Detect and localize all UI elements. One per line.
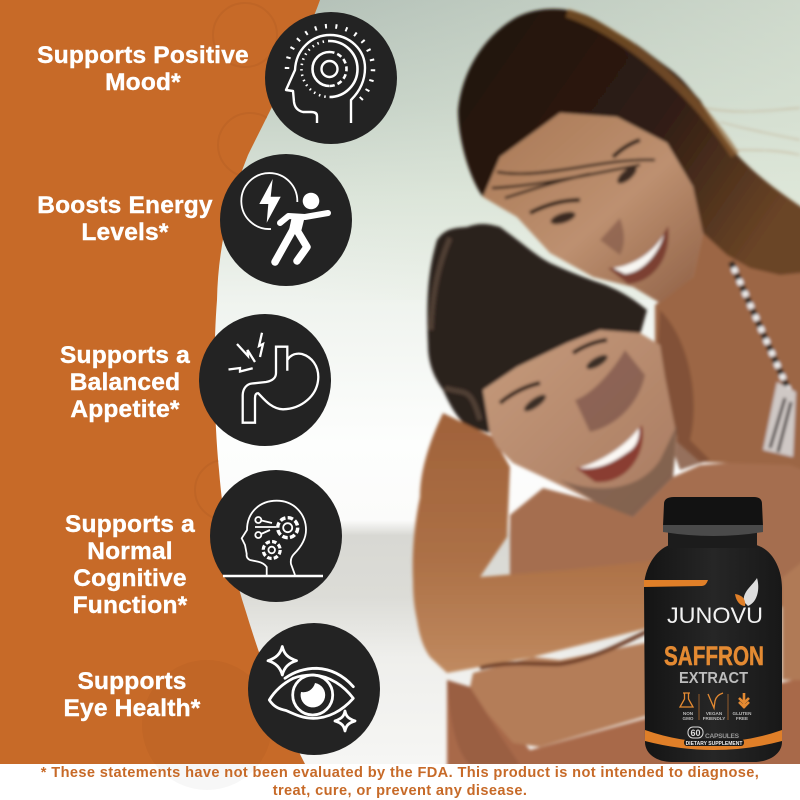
benefit text: positive mood <box>37 42 249 96</box>
clasped hand and forearm <box>470 640 660 747</box>
icon: eye with sparkles <box>248 623 380 755</box>
disclaimer footnote: * These statements have not been evaluated by the FDA. This product is not intended to diagnose, <box>41 765 759 781</box>
badge labels: FRIENDLY <box>703 716 725 721</box>
disclaimer footnote: treat, cure, or prevent any disease. <box>273 782 527 798</box>
badge icons <box>680 693 749 720</box>
woman's chest and shoulder <box>655 233 800 480</box>
icon: stomach with lightning <box>199 314 331 446</box>
woman's hair <box>458 9 800 275</box>
badge labels: VEGAN <box>706 711 723 716</box>
leaf logo <box>735 578 758 606</box>
benefit text: cognitive: Function* <box>73 592 187 619</box>
capsule count: CAPSULES <box>705 733 740 740</box>
benefit text: appetite: Supports a <box>60 342 190 369</box>
benefit text: cognitive: Cognitive <box>73 565 187 592</box>
icon: head with radiating mind <box>265 12 397 144</box>
woman's face <box>483 113 703 303</box>
man's face <box>483 330 677 517</box>
benefit text: appetite <box>60 342 190 423</box>
woman's upper arm wrapping the man <box>413 413 660 673</box>
man's lower body and legs <box>447 670 800 770</box>
badge labels <box>683 711 752 721</box>
benefit text: energy: Levels* <box>81 219 169 246</box>
orange label band bottom <box>645 730 782 750</box>
benefit text: cognitive: Supports a <box>65 511 195 538</box>
cap collar <box>663 525 763 536</box>
badge labels: NON <box>683 711 694 716</box>
badge labels: GMO <box>683 716 694 721</box>
benefit text: eye health: Supports <box>77 668 187 695</box>
benefit text: appetite: Balanced <box>70 369 180 396</box>
loose hair strands <box>705 108 800 155</box>
capsule count: 60 <box>690 728 701 738</box>
benefit text: positive mood: Mood* <box>105 69 181 96</box>
benefit text: eye health <box>63 668 200 722</box>
badge labels: FREE <box>736 716 748 721</box>
benefit text: cognitive: Normal <box>87 538 173 565</box>
product bottle: Junovu Saffron Extract <box>644 497 782 762</box>
man's hair <box>427 224 647 433</box>
disclaimer footnote <box>40 765 759 798</box>
brand name: JUNOVU <box>667 603 763 628</box>
benefit text: positive mood: Supports Positive <box>37 42 249 69</box>
capsule count: DIETARY SUPPLEMENT <box>686 741 742 747</box>
benefit text: appetite: Appetite* <box>70 396 180 423</box>
benefit text: energy: Boosts Energy <box>37 192 213 219</box>
bikini strap and top <box>731 262 796 457</box>
bottle cap <box>663 497 763 526</box>
orange label band top <box>644 580 708 587</box>
man's shoulder and chest <box>510 458 800 610</box>
benefit text: eye health: Eye Health* <box>63 695 200 722</box>
bottle body <box>644 545 782 762</box>
benefit text: cognitive <box>65 511 196 619</box>
extract label: EXTRACT <box>679 670 748 687</box>
badge labels: GLUTEN <box>733 711 752 716</box>
capsule count <box>684 727 744 747</box>
bottle neck <box>668 532 757 548</box>
icon: head with gears <box>210 470 342 602</box>
arm on the right of the bottle <box>782 540 800 680</box>
benefit text: energy <box>37 192 213 246</box>
icon: running figure with lightning bolt <box>220 154 352 286</box>
